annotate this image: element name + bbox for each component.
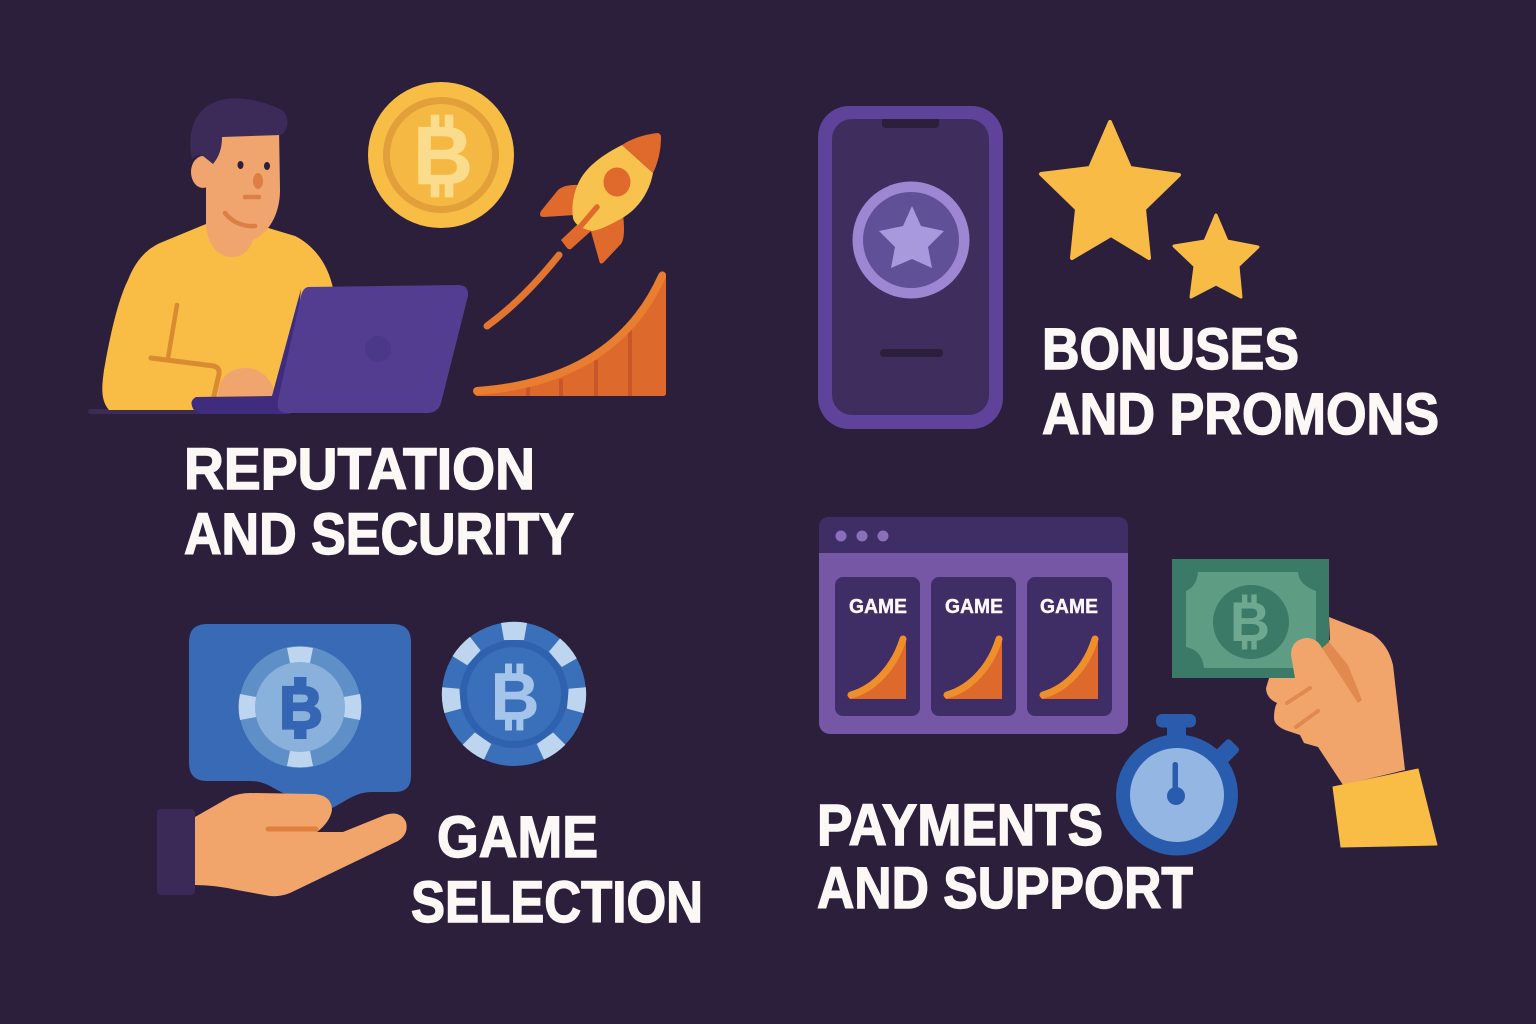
banknote: B: [1230, 591, 1270, 653]
game card 1: [835, 577, 920, 716]
panel: game selection: [157, 622, 703, 935]
heading: payments and support: PAYMENTS: [817, 793, 1103, 858]
heading: reputation and security: [184, 437, 574, 567]
game card 2: [931, 577, 1016, 716]
heading: reputation and security: AND SECURITY: [184, 502, 574, 567]
heading: bonuses and promons: BONUSES: [1042, 317, 1299, 382]
icon: open hand with cuff: [157, 793, 407, 896]
icon: bitcoin coin: B: [413, 109, 473, 202]
icon: stopwatch: [1116, 714, 1240, 856]
heading: game selection: [411, 805, 703, 935]
panel: reputation and security: [88, 82, 666, 567]
heading: game selection: GAME: [437, 805, 598, 870]
icon: game browser window: [819, 517, 1128, 734]
icon: small star: [1174, 215, 1258, 297]
game card 3: [1027, 577, 1112, 716]
game card 1: GAME: [849, 596, 907, 618]
icon: person at laptop: [88, 98, 468, 414]
heading: payments and support: [817, 793, 1193, 921]
icon: blue poker chip: [441, 622, 587, 766]
heading: bonuses and promons: [1042, 317, 1439, 447]
heading: bonuses and promons: AND PROMONS: [1042, 382, 1439, 447]
icon: phone with star badge: [818, 106, 1003, 429]
heading: game selection: SELECTION: [411, 870, 703, 935]
icon: speech bubble with chip: B: [279, 673, 323, 741]
icon: hand holding banknote: [1172, 559, 1405, 785]
icon: bitcoin coin: [368, 82, 514, 228]
icon: blue poker chip: B: [491, 660, 539, 735]
icon: speech bubble with chip: [189, 624, 411, 808]
panel: payments and support: [817, 517, 1437, 921]
chart: rising orange curve: [474, 271, 666, 396]
icon: rocket: [487, 133, 661, 326]
game card 3: GAME: [1040, 596, 1098, 618]
banknote: [1172, 559, 1329, 678]
icon: yellow sleeve: [1333, 769, 1437, 847]
panel: bonuses and promotions: [818, 106, 1439, 447]
heading: payments and support: AND SUPPORT: [817, 856, 1193, 921]
heading: reputation and security: REPUTATION: [184, 437, 535, 502]
icon: large star: [1041, 122, 1179, 258]
game card 2: GAME: [945, 596, 1003, 618]
